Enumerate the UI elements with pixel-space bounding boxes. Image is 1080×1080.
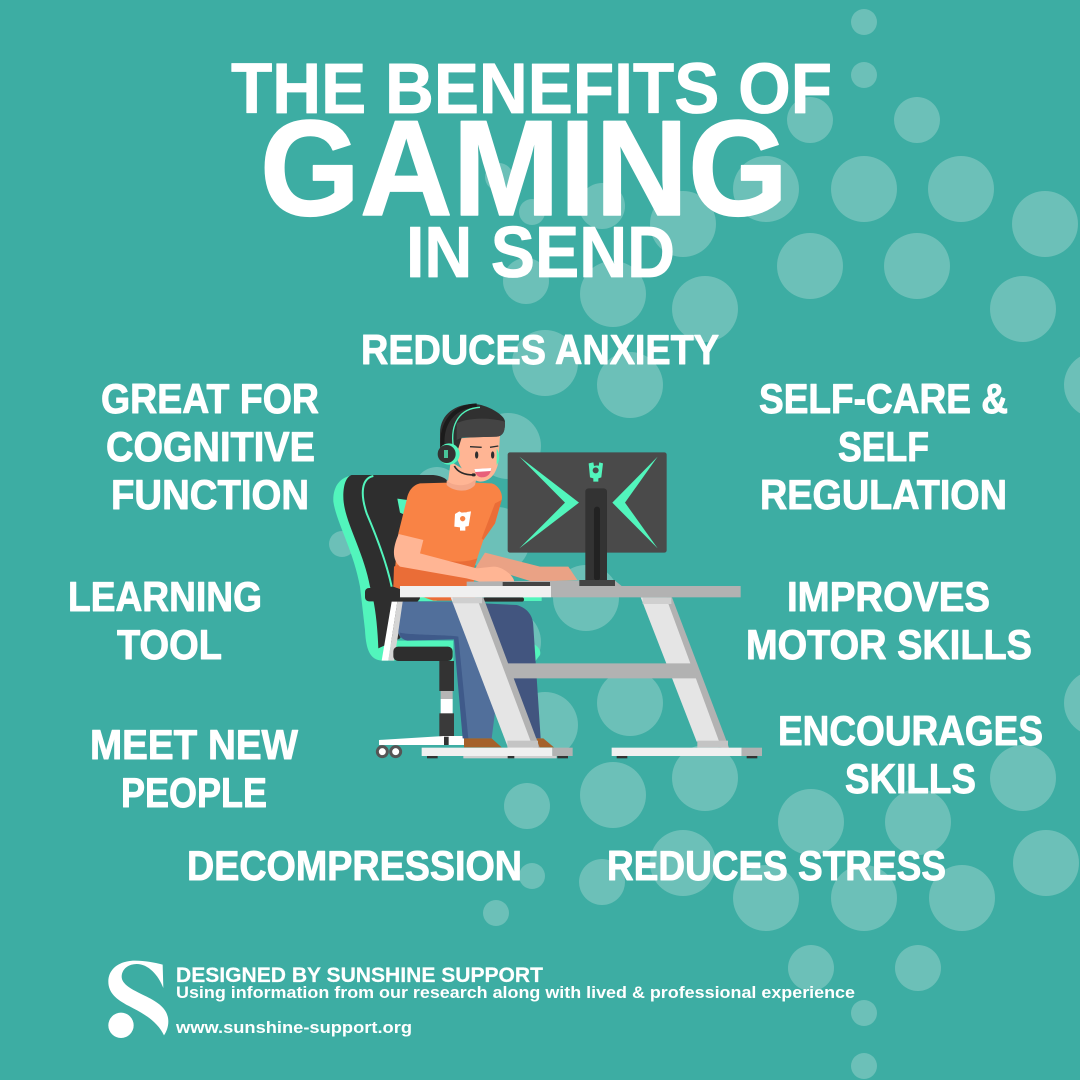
benefit: reduces anxiety: REDUCES ANXIETY xyxy=(361,326,719,373)
benefit: self-care and self regulation: SELF-CARE & xyxy=(759,375,1008,422)
keyboard xyxy=(467,580,615,586)
benefit: encourages skills xyxy=(778,707,1043,802)
illustration: gamer at desk xyxy=(333,404,762,758)
footer credit text: DESIGNED BY SUNSHINE SUPPORT xyxy=(176,964,543,987)
benefit: great for cognitive function: FUNCTION xyxy=(111,471,309,518)
benefit: meet new people xyxy=(90,721,299,816)
desk xyxy=(400,586,762,758)
benefit: decompression: DECOMPRESSION xyxy=(187,842,522,889)
benefit: great for cognitive function xyxy=(101,375,319,518)
neck and head xyxy=(440,404,505,491)
footer credit text: Using information from our research along with lived & professional experience xyxy=(176,984,855,1002)
headset xyxy=(438,443,476,476)
benefit: improves motor skills: IMPROVES xyxy=(787,573,990,620)
title: GAMING xyxy=(260,92,788,244)
benefit: improves motor skills: MOTOR SKILLS xyxy=(746,621,1032,668)
near arm xyxy=(394,534,514,583)
benefit: great for cognitive function: COGNITIVE xyxy=(106,423,315,470)
monitor xyxy=(508,452,667,586)
benefit: reduces stress: REDUCES STRESS xyxy=(607,842,946,889)
benefit: self-care and self regulation: SELF xyxy=(838,423,929,470)
benefit: learning tool: TOOL xyxy=(117,621,222,668)
benefit: improves motor skills xyxy=(746,573,1032,668)
benefit: great for cognitive function: GREAT FOR xyxy=(101,375,319,422)
title: IN SEND xyxy=(406,213,675,293)
benefit: learning tool xyxy=(68,573,262,668)
benefit: encourages skills: ENCOURAGES xyxy=(778,707,1043,754)
footer credit text xyxy=(175,964,855,1037)
benefit: meet new people: PEOPLE xyxy=(121,769,267,816)
footer xyxy=(108,961,855,1038)
footer credit text: www.sunshine-support.org xyxy=(175,1019,412,1037)
benefit: learning tool: LEARNING xyxy=(68,573,262,620)
orange t-shirt xyxy=(393,483,502,601)
benefit: self-care and self regulation xyxy=(759,375,1008,518)
shoes xyxy=(464,738,554,747)
far arm xyxy=(475,553,577,582)
title: THE BENEFITS OF xyxy=(231,50,832,129)
benefit: self-care and self regulation: REGULATION xyxy=(760,471,1007,518)
title xyxy=(231,50,832,293)
icon: Sunshine Support logo xyxy=(108,961,168,1038)
gaming chair xyxy=(333,475,542,757)
benefit: encourages skills: SKILLS xyxy=(845,755,976,802)
benefit: meet new people: MEET NEW xyxy=(90,721,299,768)
jeans xyxy=(398,602,541,738)
background bubble pattern xyxy=(329,9,1080,1079)
